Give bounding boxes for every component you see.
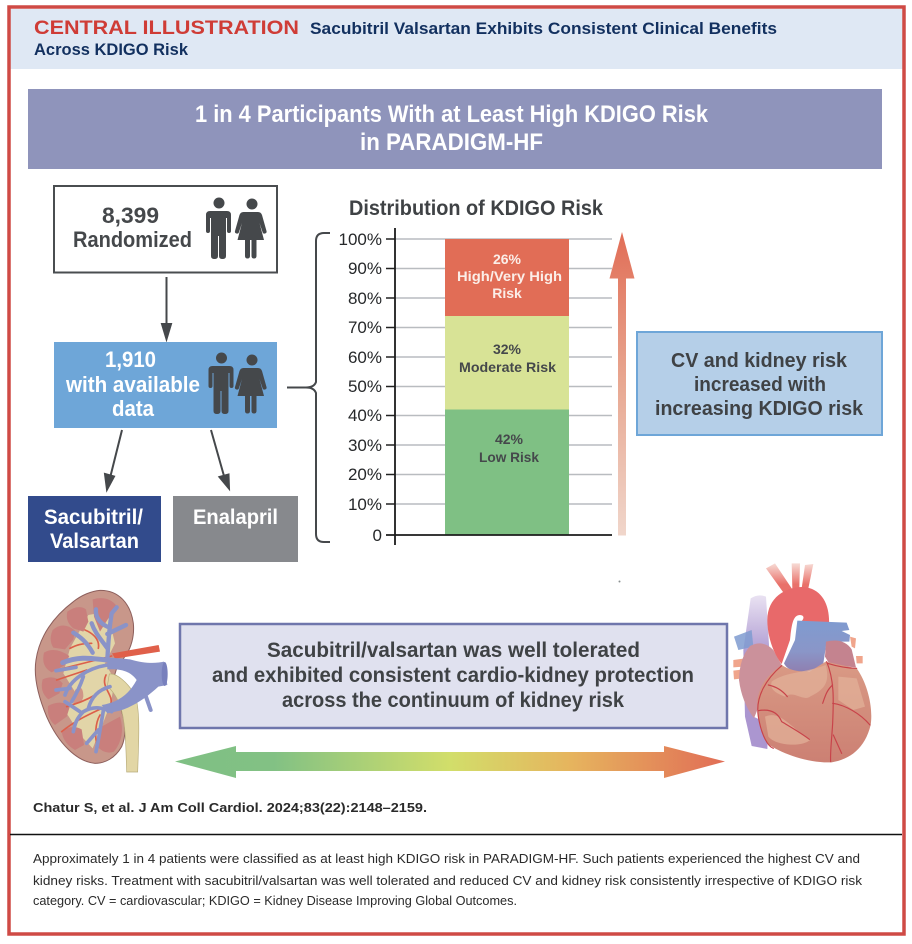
y axis labels: 70% <box>348 318 382 337</box>
box: sacubitril/valsartan <box>28 496 161 562</box>
arrow: to sacubitril/valsartan <box>105 430 122 490</box>
bar segment: moderate risk <box>445 316 569 410</box>
caption: category. CV = cardiovascular; KDIGO = Kidney Disease Improving Global Outcomes. <box>33 894 517 908</box>
y axis labels: 0 <box>373 526 382 545</box>
panel: sacubitril/valsartan conclusion: and exhibited consistent cardio-kidney protection <box>212 664 694 687</box>
arteries <box>57 630 112 743</box>
vein opening <box>162 662 168 686</box>
ureter <box>107 674 139 772</box>
icon: man and woman <box>206 198 267 259</box>
box: 8,399 randomized: 8,399 <box>102 203 159 228</box>
renal vein and branches <box>56 607 151 752</box>
ventricles <box>757 662 871 762</box>
banner <box>28 89 882 169</box>
bar segment: high / very high risk: High/Very High <box>457 268 562 284</box>
aortic arch <box>767 587 829 664</box>
pyramids <box>42 598 122 753</box>
bar segment: moderate risk: 32% <box>493 341 522 357</box>
bar segment: high / very high risk: 26% <box>493 251 522 267</box>
chart title: Distribution of KDIGO Risk <box>349 197 603 220</box>
y axis labels: 50% <box>348 377 382 396</box>
bar segment: moderate risk: Moderate Risk <box>459 359 556 375</box>
left atrium <box>825 641 856 667</box>
box: 1,910 with available data <box>54 342 277 428</box>
arrow: to enalapril <box>211 430 229 488</box>
box: 8,399 randomized <box>54 186 277 272</box>
callout: CV and kidney risk: increasing KDIGO risk <box>655 398 864 420</box>
box: 1,910 with available data: with available <box>65 372 200 397</box>
renal sinus fat <box>63 612 115 748</box>
y axis labels: 90% <box>348 259 382 278</box>
y axis labels: 60% <box>348 348 382 367</box>
y axis labels: 100% <box>339 230 382 249</box>
caption: kidney risks. Treatment with sacubitril/valsartan was well tolerated and reduced CV and kidney risk consistently irrespective of KDIGO risk <box>33 874 863 888</box>
renal artery <box>112 645 160 659</box>
y axis labels: 10% <box>348 495 382 514</box>
bar segment: low risk: 42% <box>495 431 524 447</box>
arrow: increasing risk <box>610 232 634 536</box>
callout: CV and kidney risk: increased with <box>694 374 826 396</box>
banner line 2: in PARADIGM-HF <box>360 129 543 156</box>
icon: kidney <box>35 590 168 772</box>
box: 1,910 with available data: 1,910 <box>105 347 156 372</box>
box: sacubitril/valsartan: Sacubitril/ <box>44 506 143 529</box>
y axis labels <box>339 230 382 545</box>
box: enalapril: Enalapril <box>193 506 278 529</box>
left pulmonary veins <box>734 630 753 650</box>
banner line 1: 1 in 4 Participants With at Least High KDIGO Risk <box>195 101 709 128</box>
title <box>34 18 777 59</box>
bar segment: low risk <box>445 410 569 535</box>
caption: Approximately 1 in 4 patients were classified as at least high KDIGO risk in PARADIGM-HF. Such patients experienced the highest CV and <box>33 852 860 866</box>
box: enalapril <box>173 496 298 562</box>
panel: sacubitril/valsartan conclusion <box>180 624 727 728</box>
vena cava <box>743 595 769 749</box>
title label: CENTRAL ILLUSTRATION <box>34 18 299 39</box>
caption <box>33 852 863 908</box>
main renal vein <box>102 657 167 713</box>
icon: man and woman <box>208 352 267 414</box>
bar segment: high / very high risk: Risk <box>492 285 522 301</box>
panel: sacubitril/valsartan conclusion: Sacubitril/valsartan was well tolerated <box>267 639 640 662</box>
right atrium <box>739 643 782 718</box>
aortic branches <box>766 563 813 593</box>
y axis labels: 40% <box>348 406 382 425</box>
ventricle highlights <box>765 665 865 745</box>
y axis labels: 20% <box>348 465 382 484</box>
bar segment: high / very high risk <box>445 239 569 316</box>
icon: heart <box>733 563 871 762</box>
box: 8,399 randomized: Randomized <box>73 227 192 252</box>
coronary arteries <box>758 662 870 762</box>
divider line <box>10 834 902 836</box>
stray dot <box>618 580 620 582</box>
box: 1,910 with available data: data <box>112 396 155 421</box>
chart: distribution of KDIGO risk <box>339 197 612 545</box>
brace <box>287 233 330 542</box>
citation: Chatur S, et al. J Am Coll Cardiol. 2024;83(22):2148–2159. <box>33 800 427 815</box>
box: sacubitril/valsartan: Valsartan <box>50 530 139 553</box>
title line 2: Across KDIGO Risk <box>34 40 189 59</box>
bar segment: low risk: Low Risk <box>479 449 539 465</box>
arrow: kidney to heart gradient <box>175 746 725 778</box>
header band <box>9 9 903 69</box>
title line 1: Sacubitril Valsartan Exhibits Consistent Clinical Benefits <box>310 19 777 38</box>
arrow: randomized to available data <box>162 277 171 339</box>
y axis labels: 30% <box>348 436 382 455</box>
callout: CV and kidney risk: CV and kidney risk <box>671 350 848 372</box>
callout: CV and kidney risk <box>637 332 882 435</box>
kidney body <box>35 590 134 763</box>
panel: sacubitril/valsartan conclusion: across the continuum of kidney risk <box>282 689 624 712</box>
y axis labels: 80% <box>348 289 382 308</box>
pulmonary artery <box>784 621 850 672</box>
